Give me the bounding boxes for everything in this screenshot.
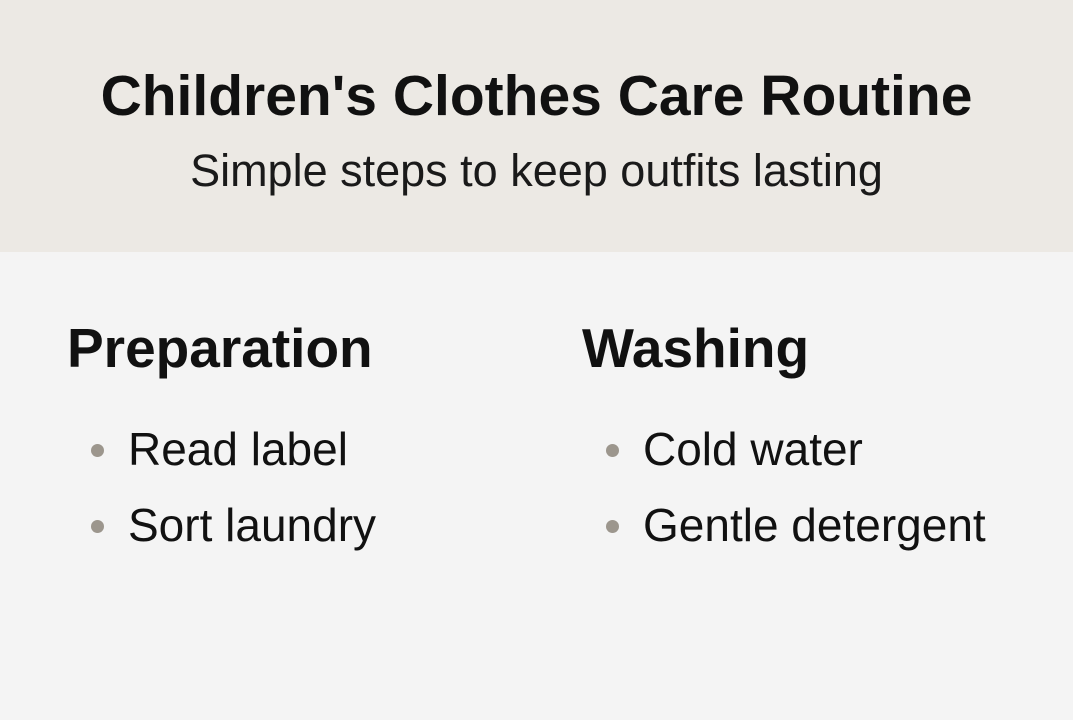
subtitle: Simple steps to keep outfits lasting — [190, 145, 883, 196]
item: gentle detergent: Gentle detergent — [643, 499, 986, 551]
heading: washing: Washing — [582, 317, 809, 379]
title: Children's Clothes Care Routine — [101, 64, 972, 128]
header band — [0, 0, 1073, 252]
item: read label: Read label — [128, 423, 348, 475]
panel: preparation — [67, 317, 376, 551]
item: cold water: Cold water — [643, 423, 863, 475]
panel: washing — [582, 317, 986, 551]
item: sort laundry: Sort laundry — [128, 499, 376, 551]
heading: preparation: Preparation — [67, 317, 373, 379]
